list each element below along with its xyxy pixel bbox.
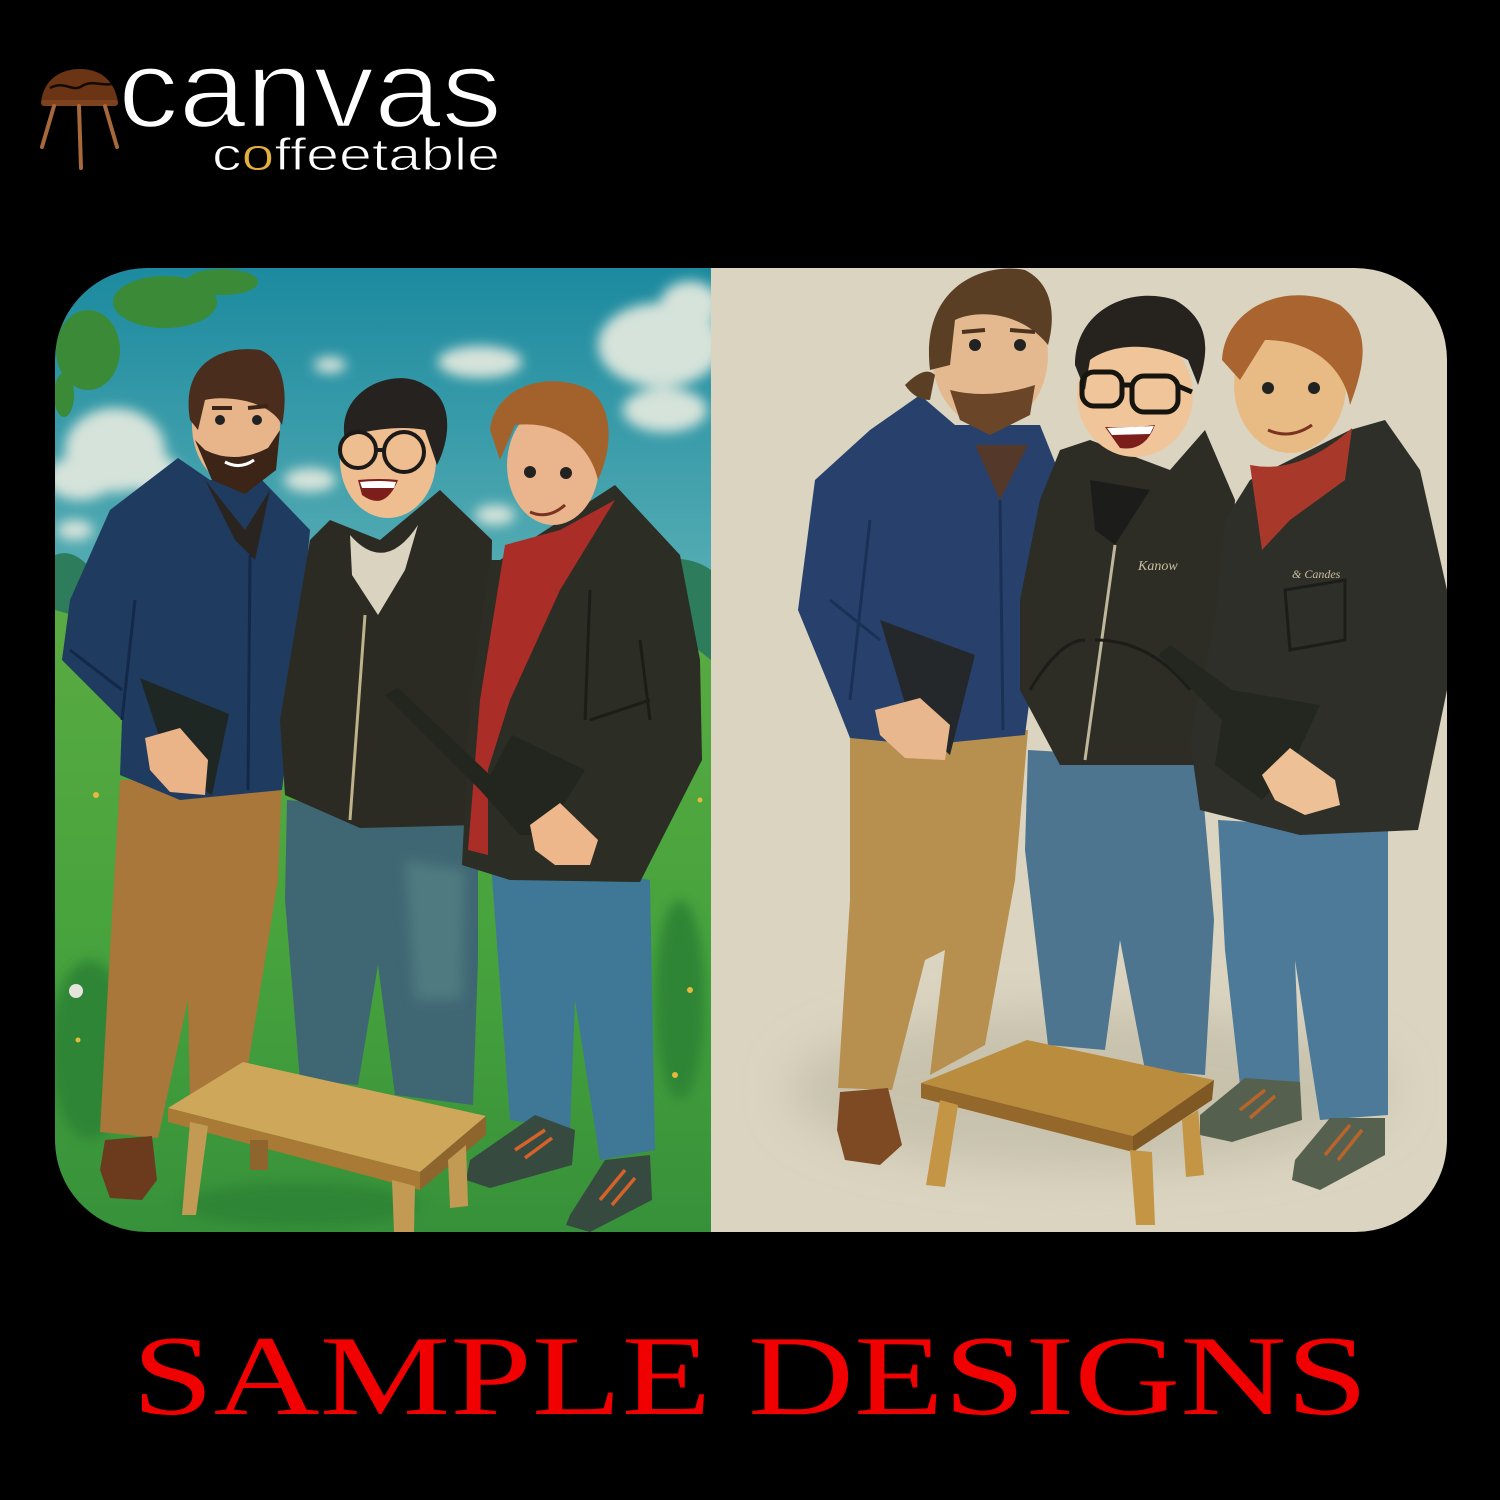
logo: canvas coffeetable [41, 28, 502, 180]
person 1: ponytail navy jacket [798, 269, 1058, 1165]
jacket [62, 458, 310, 800]
jacket seams [830, 500, 1003, 730]
hoodie [1020, 430, 1235, 765]
trousers [100, 780, 282, 1138]
canvas background [711, 268, 1447, 1232]
panel: sample mat [46, 268, 1447, 1232]
clouds [46, 281, 722, 540]
flowers [69, 792, 702, 1078]
jeans [285, 800, 478, 1105]
pocket [1285, 580, 1345, 650]
shoe [100, 1136, 157, 1200]
person 3: red scarf jacket [1158, 295, 1447, 1190]
jacket [1190, 420, 1447, 835]
notebook [1158, 645, 1320, 800]
hand [145, 728, 208, 795]
person 3: red scarf jacket [385, 381, 702, 1232]
head [932, 283, 1048, 427]
head [192, 398, 280, 472]
jacket seams [585, 590, 650, 720]
distant hills [55, 553, 711, 660]
logo wordmark: coffeetable: coffeetable [212, 129, 500, 180]
shoes [466, 1115, 652, 1232]
name embroidery: & Candes [1292, 567, 1341, 581]
jacket [798, 395, 1058, 745]
head [1234, 317, 1346, 453]
jeans highlight [405, 860, 465, 1000]
scarf [468, 500, 615, 855]
jeans [1218, 820, 1388, 1120]
person 1: beard navy jacket [62, 349, 310, 1200]
title: sample designs: SAMPLE DESIGNS [132, 1312, 1368, 1439]
jeans [1025, 750, 1214, 1075]
hand [530, 803, 598, 865]
jacket [462, 485, 702, 882]
person 2: glasses black hoodie [1020, 296, 1235, 1075]
notebook [385, 688, 585, 835]
panel: right cream design [711, 268, 1447, 1232]
notebook [140, 678, 229, 795]
hand [1262, 748, 1340, 815]
name embroidery: Kanow [1137, 559, 1178, 574]
head [340, 428, 436, 518]
notebook [880, 620, 975, 755]
bench [168, 1062, 486, 1232]
glasses [340, 432, 424, 472]
sky [55, 268, 711, 598]
tree leaves [54, 269, 258, 417]
jacket seams [70, 555, 250, 790]
panel: left anime park design [46, 268, 722, 1232]
shoe [837, 1088, 902, 1165]
shoes [1200, 1078, 1385, 1190]
head [1077, 333, 1193, 457]
grass shading [50, 900, 705, 1227]
floor shadow [790, 1010, 1390, 1170]
hand [875, 698, 950, 760]
stool [921, 1040, 1214, 1225]
jeans [490, 850, 655, 1160]
glasses [1082, 372, 1192, 412]
person 2: glasses black hoodie [280, 378, 492, 1105]
icon: coffee table grill [41, 69, 118, 168]
pocket [1030, 640, 1190, 690]
scarf [1250, 428, 1352, 550]
hoodie [280, 490, 492, 828]
head [507, 424, 598, 525]
grass field [55, 590, 711, 1232]
trousers [838, 730, 1028, 1090]
logo wordmark: canvas: canvas [118, 28, 502, 151]
